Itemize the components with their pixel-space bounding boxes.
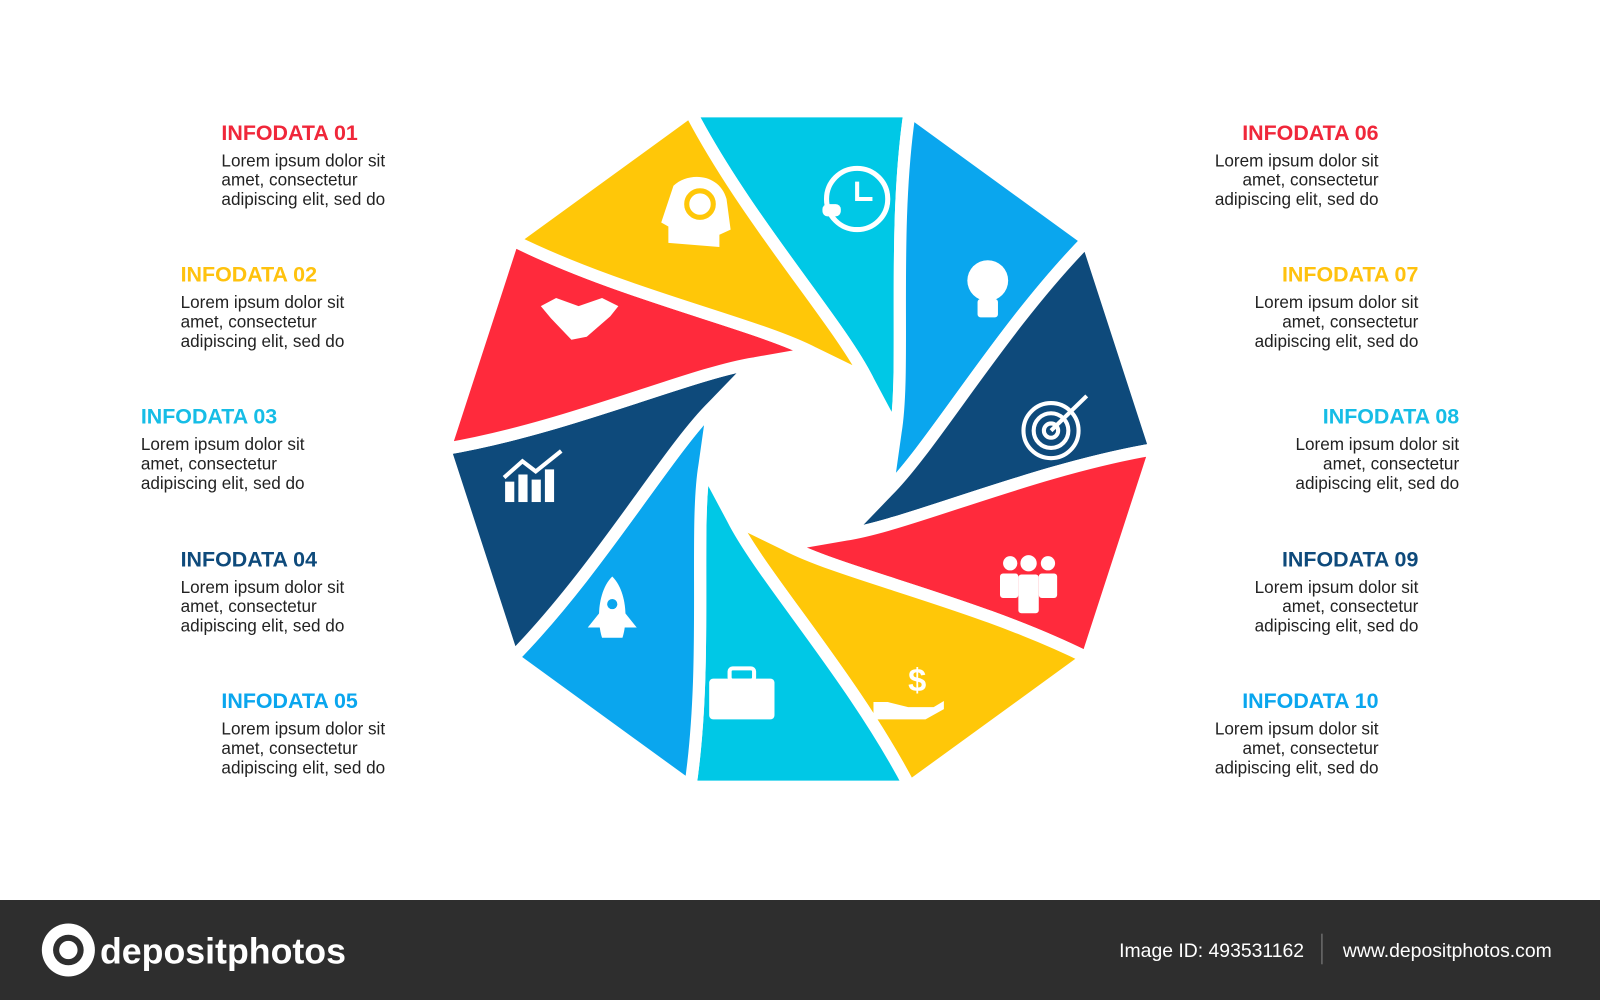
- icon: gear head: [661, 177, 731, 247]
- text 03: Lorem ipsum dolor sit: [141, 434, 305, 454]
- text 06: Lorem ipsum dolor sit: [1215, 150, 1379, 170]
- icon: rocket: [588, 577, 637, 638]
- text 10: INFODATA 10: [1242, 689, 1379, 713]
- text 10: adipiscing elit, sed do: [1215, 757, 1379, 777]
- text 03: [141, 404, 305, 493]
- text 08: amet, consectetur: [1323, 453, 1459, 473]
- text 01: [221, 121, 385, 209]
- text 02: [181, 263, 345, 351]
- segment 3 navy: [846, 240, 1155, 535]
- left text blocks: [141, 121, 385, 777]
- text 02: amet, consectetur: [181, 312, 317, 332]
- text 10: [1215, 689, 1379, 777]
- icon: bulb: [967, 260, 1008, 317]
- icon: money hand: [873, 661, 944, 719]
- text 09: adipiscing elit, sed do: [1255, 616, 1418, 636]
- text 03: adipiscing elit, sed do: [141, 473, 305, 493]
- footer id: www.depositphotos.com: [1342, 940, 1552, 962]
- footer id: [1119, 934, 1552, 964]
- text 06: INFODATA 06: [1242, 121, 1379, 145]
- text 01: Lorem ipsum dolor sit: [221, 150, 385, 170]
- text 02: INFODATA 02: [181, 263, 317, 287]
- segment 8 navy: [445, 363, 754, 658]
- text 07: INFODATA 07: [1282, 263, 1418, 287]
- text 05: amet, consectetur: [221, 738, 358, 758]
- text 09: INFODATA 09: [1282, 547, 1418, 571]
- text 05: adipiscing elit, sed do: [221, 757, 385, 777]
- text 04: INFODATA 04: [181, 547, 317, 571]
- icon: people: [1000, 555, 1057, 613]
- segment 6 cyan: [690, 466, 910, 787]
- text 07: Lorem ipsum dolor sit: [1255, 292, 1419, 312]
- text 08: [1295, 404, 1459, 493]
- text 05: [221, 689, 385, 777]
- text 09: [1255, 547, 1419, 636]
- segment 5 yellow: [733, 519, 1087, 787]
- icon: handshake: [541, 298, 618, 340]
- segment 9 red: [445, 240, 813, 449]
- text 07: amet, consectetur: [1282, 312, 1419, 332]
- text 10: amet, consectetur: [1242, 738, 1379, 758]
- text 08: Lorem ipsum dolor sit: [1295, 434, 1459, 454]
- text 04: adipiscing elit, sed do: [181, 616, 344, 636]
- text 05: Lorem ipsum dolor sit: [221, 719, 385, 739]
- segment 7 blue: [513, 407, 713, 787]
- text 01: adipiscing elit, sed do: [221, 189, 385, 209]
- segment 10 yellow: [513, 111, 867, 379]
- text 01: INFODATA 01: [221, 121, 358, 145]
- icon: chart: [504, 451, 561, 502]
- text 03: amet, consectetur: [141, 453, 277, 473]
- text 09: amet, consectetur: [1282, 596, 1419, 616]
- text 04: [181, 547, 345, 636]
- text 04: Lorem ipsum dolor sit: [181, 577, 345, 597]
- text 06: [1215, 121, 1379, 209]
- icon: target: [1023, 396, 1087, 458]
- text 07: [1255, 263, 1419, 351]
- text 03: INFODATA 03: [141, 404, 277, 428]
- text 02: Lorem ipsum dolor sit: [181, 292, 345, 312]
- text 09: Lorem ipsum dolor sit: [1255, 577, 1419, 597]
- spiral decagon diagram: [445, 111, 1155, 787]
- text 10: Lorem ipsum dolor sit: [1215, 719, 1379, 739]
- segment 2 blue: [887, 111, 1087, 491]
- icon: phone clock: [822, 168, 888, 230]
- icon: money hand: $: [908, 661, 926, 698]
- footer bar: [0, 900, 1600, 1000]
- text 07: adipiscing elit, sed do: [1255, 331, 1418, 351]
- footer logo: depositphotos: [100, 931, 346, 971]
- segment 1 cyan: [690, 111, 910, 432]
- icons: [504, 168, 1087, 719]
- text 02: adipiscing elit, sed do: [181, 331, 344, 351]
- text 06: amet, consectetur: [1242, 170, 1379, 190]
- footer id: Image ID: 493531162: [1119, 940, 1304, 962]
- text 05: INFODATA 05: [221, 689, 358, 713]
- footer logo: [42, 923, 346, 977]
- segment 4 red: [787, 449, 1155, 658]
- icon: briefcase: [709, 668, 774, 719]
- text 01: amet, consectetur: [221, 170, 358, 190]
- text 08: adipiscing elit, sed do: [1295, 473, 1459, 493]
- text 06: adipiscing elit, sed do: [1215, 189, 1379, 209]
- right text blocks: [1215, 121, 1459, 777]
- text 08: INFODATA 08: [1323, 404, 1459, 428]
- text 04: amet, consectetur: [181, 596, 317, 616]
